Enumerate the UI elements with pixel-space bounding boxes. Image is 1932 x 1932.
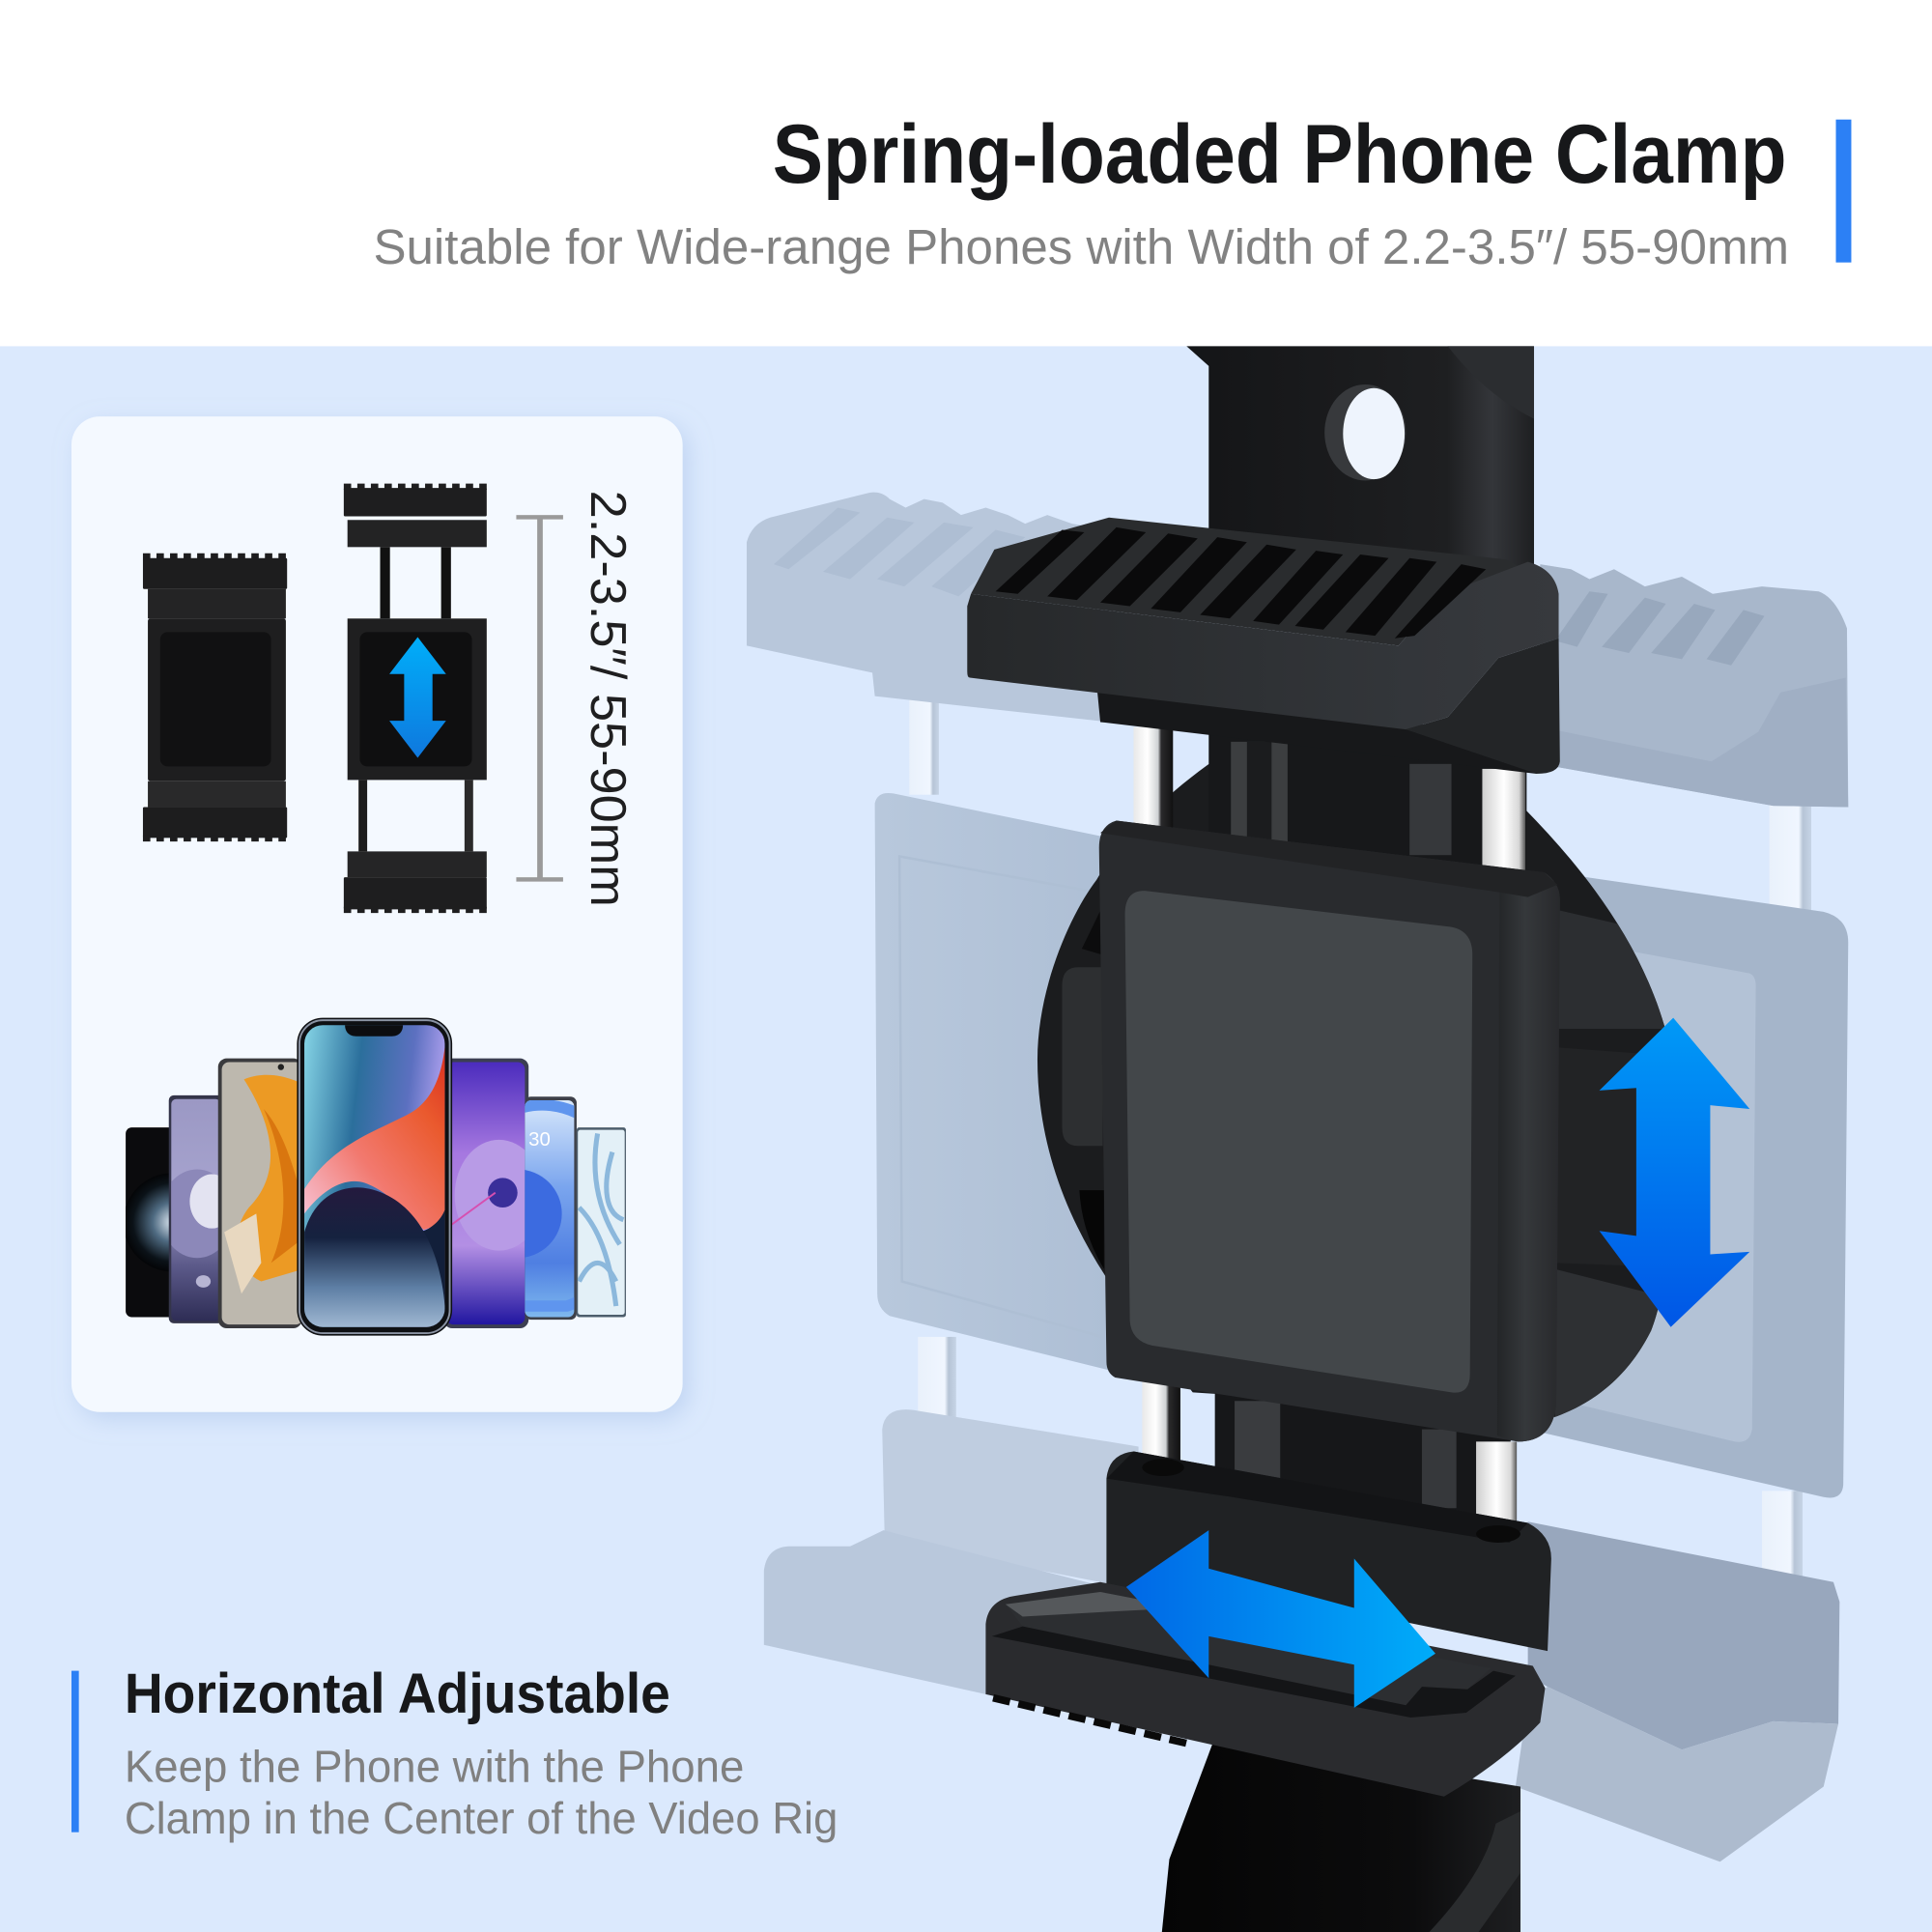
product: main clamp <box>967 346 1725 1932</box>
product: ghost clamp positions <box>747 493 1848 1861</box>
ghost lower block right <box>1528 1521 1839 1749</box>
phone left 3 <box>168 1095 219 1323</box>
phone left 2 <box>218 1059 303 1328</box>
ghost pins <box>909 696 1811 1589</box>
phone clock digits: 30 <box>528 1129 551 1151</box>
upper struts <box>1231 742 1452 855</box>
upper jaw <box>967 518 1560 774</box>
jaw underside teeth <box>993 1698 1193 1745</box>
jaw concave side <box>1406 639 1560 774</box>
title: Spring-loaded Phone Clamp <box>773 107 1786 201</box>
dimension label: 2.2-3.5″/ 55-90mm <box>580 491 636 907</box>
iphone notch <box>345 1025 403 1037</box>
phone right 1 <box>446 1059 529 1328</box>
phone lineup <box>124 1018 632 1336</box>
clamp body <box>1099 820 1560 1441</box>
ghost upper jaw right <box>1540 564 1848 807</box>
dimension bracket <box>516 515 563 882</box>
ghost lower block left <box>882 1409 1139 1589</box>
section body text: Keep the Phone with the Phone <box>125 1741 744 1791</box>
arrow: horizontal adjustment <box>1126 1530 1435 1708</box>
phone far right <box>577 1127 626 1318</box>
jaw front face <box>967 562 1559 729</box>
clamp closed diagram <box>143 556 287 838</box>
section body text <box>125 1741 838 1843</box>
section heading: Horizontal Adjustable <box>125 1662 670 1725</box>
small double arrow <box>389 637 446 757</box>
section body text: Clamp in the Center of the Video Rig <box>125 1793 838 1843</box>
title accent bar <box>1836 120 1851 263</box>
phone right 2 <box>525 1096 577 1320</box>
body pad <box>1125 891 1472 1393</box>
panel: size card <box>71 416 683 1412</box>
ghost body left <box>875 793 1109 1370</box>
ghost lower jaw left <box>764 1530 1115 1694</box>
ghost lower jaw right <box>1516 1687 1838 1861</box>
section accent bar <box>71 1671 79 1833</box>
lower block <box>1106 1452 1551 1651</box>
phone far left <box>126 1127 169 1318</box>
ghost upper jaw left <box>747 493 1109 722</box>
lower jaw <box>985 1582 1545 1797</box>
clamp extended diagram <box>344 487 487 910</box>
centre column <box>1208 727 1526 887</box>
guide pins <box>1133 727 1525 1535</box>
rotation disc <box>1037 764 1665 1417</box>
lower struts <box>1215 1380 1511 1516</box>
lower stem <box>1162 1737 1520 1932</box>
phone centre <box>297 1018 452 1336</box>
subtitle: Suitable for Wide-range Phones with Width of 2.2-3.5″/ 55-90mm <box>373 219 1789 274</box>
post hole <box>1324 384 1406 480</box>
ghost body right <box>1528 868 1848 1497</box>
mount post <box>1186 346 1534 591</box>
arrow: vertical adjustment <box>1600 1018 1749 1327</box>
jaw neck <box>1096 684 1537 774</box>
grip teeth <box>996 527 1486 639</box>
jaw top surface <box>971 518 1555 645</box>
